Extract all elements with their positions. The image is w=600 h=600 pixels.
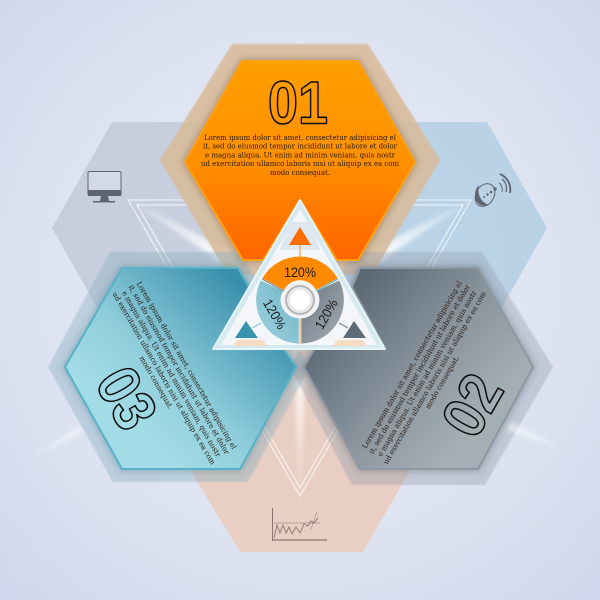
text block 03: modo consequat. [138,354,175,411]
central triangle hub [213,200,385,349]
background hexagon: bottom peach [178,348,422,552]
halo: top orange hexagon [160,44,440,275]
label: blue 120%: 120% [260,297,289,332]
connector lines [252,245,348,328]
label: grey 120%: 120% [312,297,341,332]
panel 03: blue hexagon [65,268,296,471]
text block 01: ud exercitation ullamco laboris nisi ut aliquip ex ea com [201,159,399,168]
donut sector: orange [262,257,338,290]
text block 01: Lorem ipsum dolor sit amet, consectetur adipisicing el [204,133,397,142]
light ray: lower right [507,422,560,448]
small triangle: top [289,227,311,245]
text block 01 [201,133,399,177]
donut sector: grey [301,280,344,344]
text block 02: modo consequat. [423,354,461,410]
text block 01: e magna aliqua. Ut enim ad minim veniam, quis nostr [205,150,395,159]
number 03: 03 [83,356,171,441]
text block 01: it, sed do eiusmod tempor incididunt ut labore et dolor [203,142,397,151]
sector dividers [262,279,338,344]
light ray: lower left [33,426,83,457]
number 01: 01 [268,70,328,136]
background hexagon: left grey [52,122,292,334]
text block 02: e magna aliqua. Ut enim ad minim veniam, quis nostr [376,289,479,458]
text block 03: ud exercitation ullamco laboris nisi ut aliquip ex ea com [111,290,217,466]
panel 01: orange hexagon [185,61,415,260]
small triangle: right [343,321,366,338]
icon: desktop monitor [88,172,121,202]
text block 02: Lorem ipsum dolor sit amet, consectetur adipisicing el [360,279,464,450]
centre circle [282,282,318,318]
text block 03: e magna aliqua. Ut enim ad minim veniam, quis nostr [120,289,223,459]
halo: left blue hexagon [48,252,310,482]
label: orange 120%: 120% [284,265,316,280]
number 02: 02 [428,363,516,448]
text block 03: it, sed do eiusmod tempor incididunt ut labore et dolor [127,283,232,456]
text block 02: ud exercitation ullamco laboris nisi ut aliquip ex ea com [381,290,488,466]
icon: satellite dish [471,174,510,210]
halo: right grey hexagon [290,252,553,485]
panel 02: grey hexagon [304,268,533,470]
outlined large triangles [128,200,471,496]
small triangle: left [235,321,258,338]
icon: line chart [272,508,327,541]
background hexagon: right blue [308,122,547,334]
text block 03: Lorem ipsum dolor sit amet, consectetur adipisicing el [135,280,239,451]
text block 02: it, sed do eiusmod tempor incididunt ut labore et dolor [367,282,472,455]
text block 01: modo consequat. [270,168,330,177]
donut sector: blue [256,280,299,344]
light rays [125,40,475,515]
